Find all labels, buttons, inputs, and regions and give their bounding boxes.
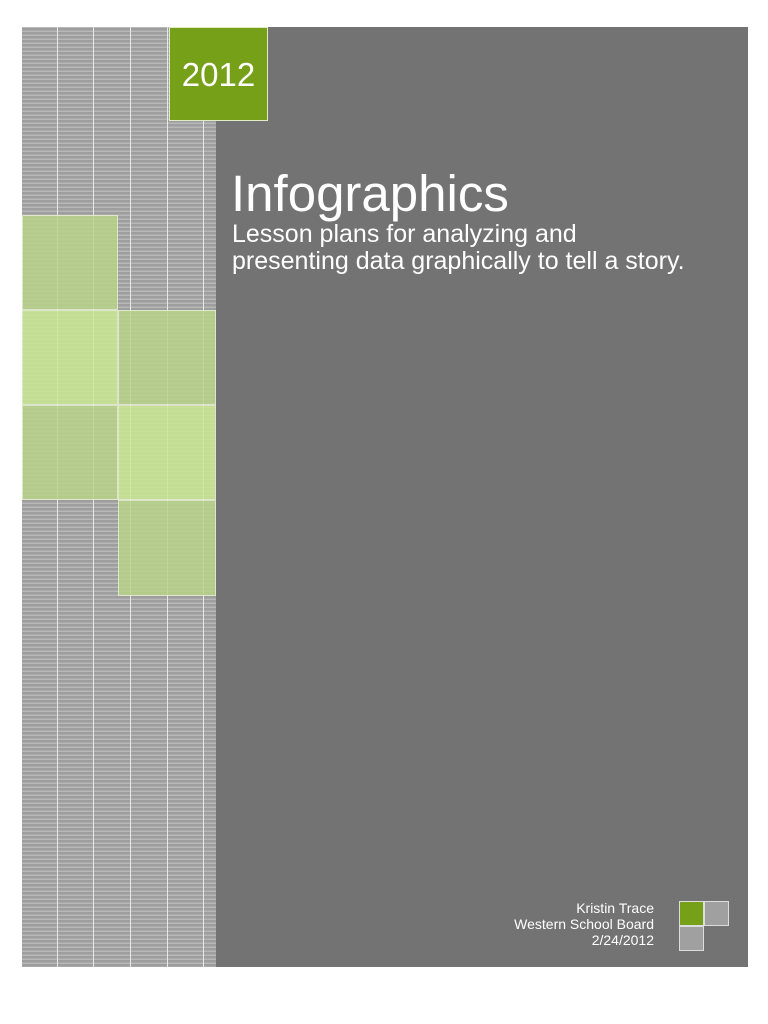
author block: Western School Board	[514, 916, 654, 932]
author block	[514, 900, 654, 948]
subtitle: presenting data graphically to tell a story.	[232, 247, 685, 275]
year box: 2012	[182, 56, 255, 93]
author block: 2/24/2012	[592, 932, 654, 948]
gray main panel	[216, 27, 748, 967]
green blocks	[22, 215, 216, 596]
year box	[169, 27, 268, 121]
icon: squares	[679, 901, 729, 951]
patterned strip	[22, 27, 216, 967]
subtitle: Lesson plans for analyzing and	[232, 220, 577, 248]
author block: Kristin Trace	[576, 900, 654, 916]
title: Infographics	[231, 165, 509, 222]
subtitle	[232, 220, 685, 275]
